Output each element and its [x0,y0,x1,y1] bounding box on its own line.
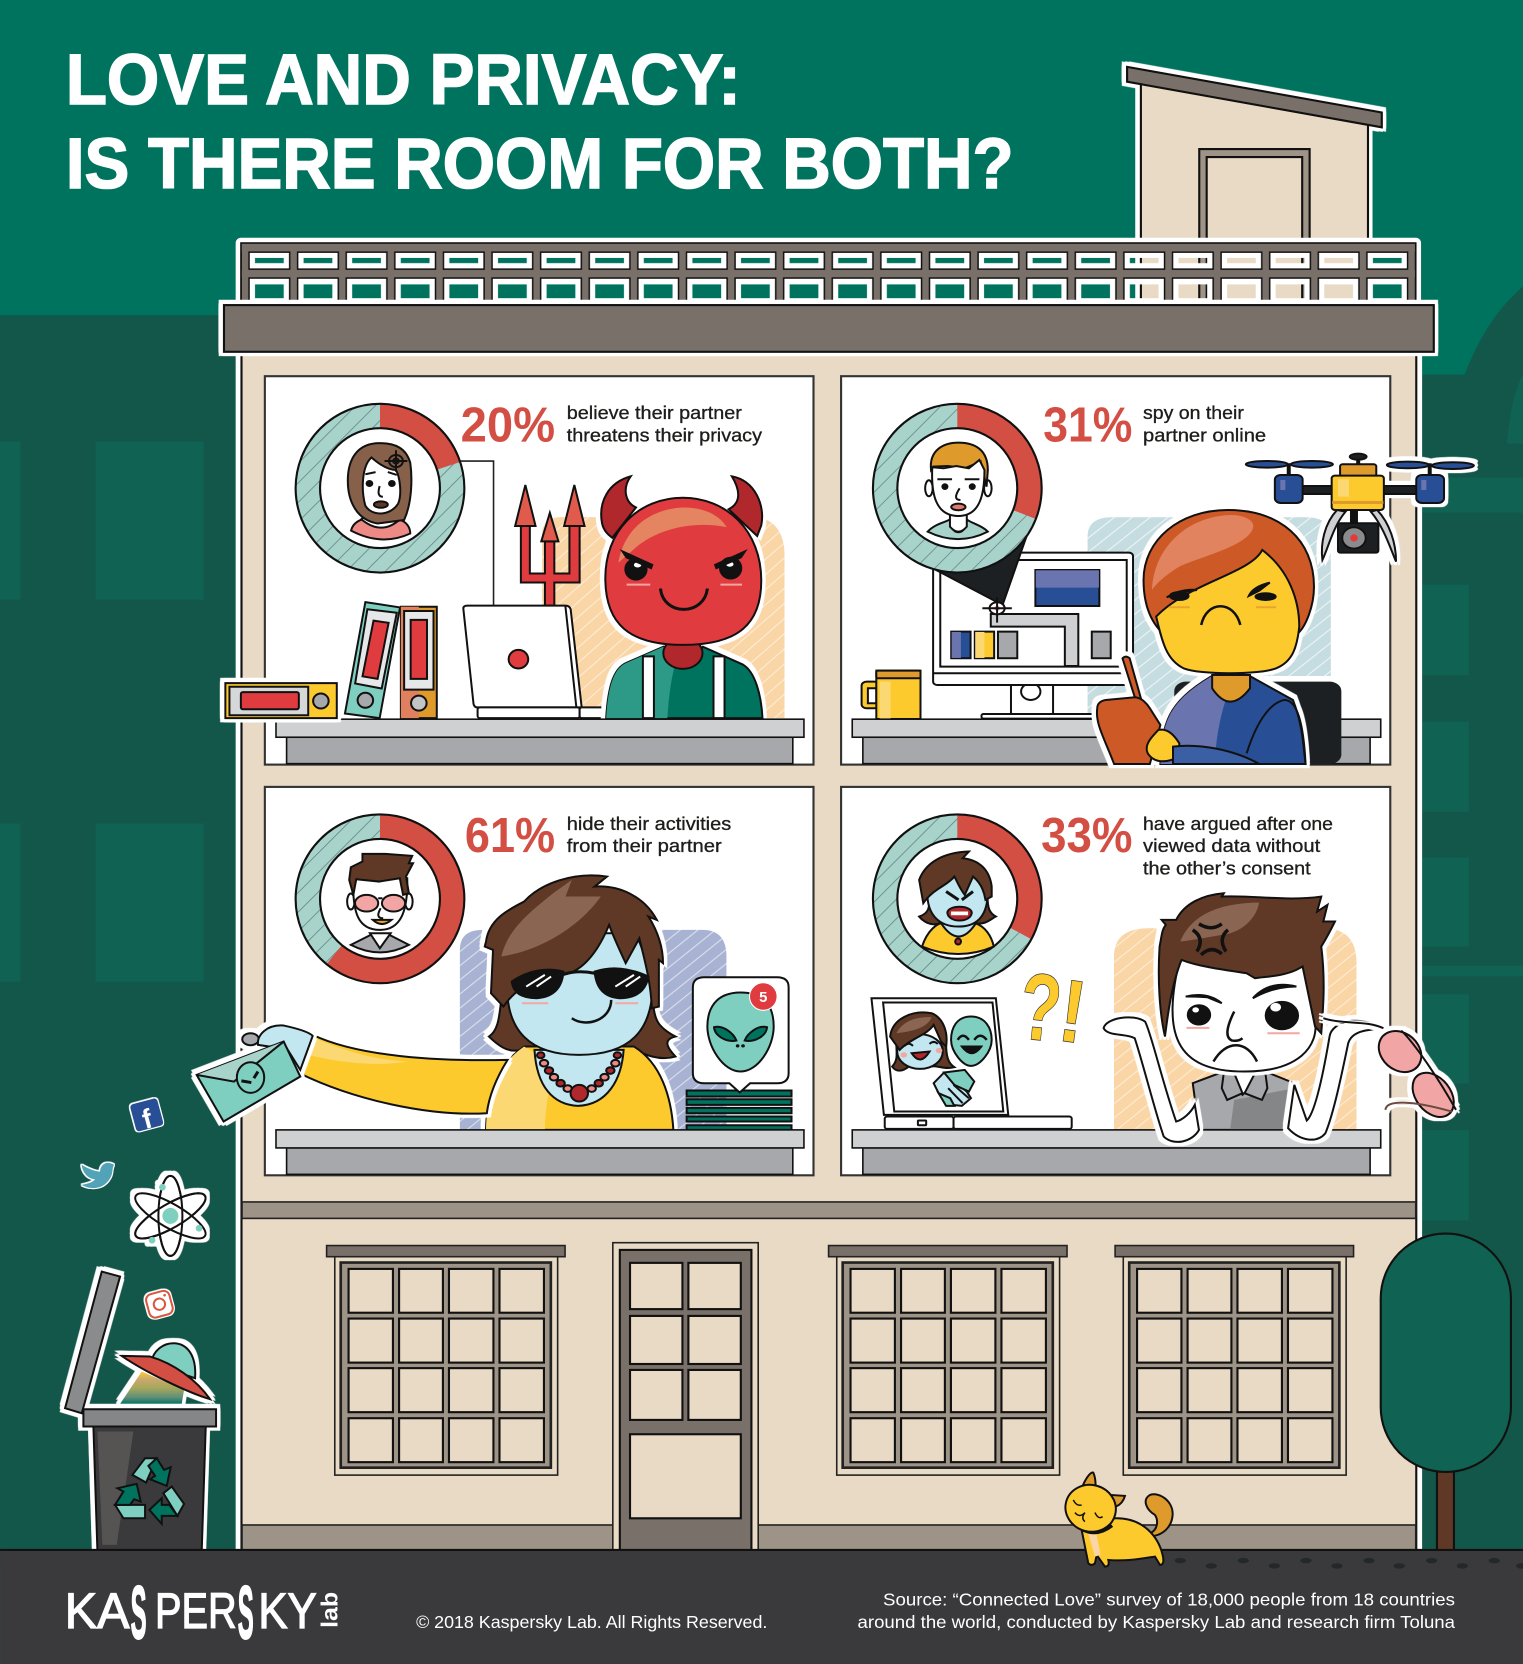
mug [862,671,920,719]
angry man head [1159,893,1335,1072]
pink glasses [1323,1018,1462,1122]
copyright: © 2018 Kaspersky Lab. All Rights Reserved. [416,1612,767,1632]
tree [1381,1234,1511,1550]
caption: spy on their partner online [1143,403,1266,445]
road [0,1550,1523,1664]
teal binder [345,602,400,718]
panel background [265,376,814,765]
cat [1060,1473,1173,1567]
entrance door [613,1243,758,1550]
caption: have argued after one viewed data without the other's consent: have argued after one [1143,814,1333,834]
desk [276,719,804,764]
panel: 61% hide activities [197,787,813,1175]
source note: around the world, conducted by Kaspersky Lab and research firm Toluna [858,1612,1455,1632]
question and exclamation marks [1015,953,1092,1063]
avatar: worried woman [348,443,411,539]
caption: have argued after one viewed data without the other's consent: the other’s consent [1143,858,1311,878]
statistic: 20%: 20% [461,398,555,452]
caption: believe their partner threatens their privacy: believe their partner [567,403,742,423]
logo: Kaspersky Lab: KA [65,1583,130,1639]
logo: Kaspersky Lab: S [131,1571,147,1655]
source note: Source: “Connected Love” survey of 18,000 people from 18 countries [883,1590,1455,1610]
caption: spy on their partner online: partner online [1143,425,1266,445]
donut chart 31 percent [873,404,1042,573]
caption: hide their activities from their partner: from their partner [567,836,722,856]
logo: Kaspersky Lab: lab [317,1592,343,1628]
roof railing parapet [238,240,1418,306]
devil character [601,476,762,718]
title [66,41,1014,204]
panel background [265,787,814,1175]
background building left [0,315,239,1567]
desk [852,1130,1381,1174]
panel background [841,376,1390,765]
rooftop penthouse [1127,67,1382,310]
trident [515,485,585,606]
logo: Kaspersky Lab: PER [155,1583,237,1639]
orange binder [401,607,437,718]
caption: spy on their partner online: spy on their [1143,403,1244,423]
notification badge: 5 [759,990,767,1006]
logo: Kaspersky Lab [65,1571,343,1655]
spying woman character [1097,510,1314,764]
caption: have argued after one viewed data without the other's consent: viewed data without [1143,836,1320,856]
recycling bin [65,1272,216,1551]
angry man torso [1193,1072,1294,1130]
panel background [841,787,1390,1175]
peach hatched backdrop [542,517,785,718]
pavement dots [1175,1558,1523,1569]
logo: Kaspersky Lab: S [238,1571,254,1655]
title: IS THERE ROOM FOR BOTH? [66,125,1014,204]
envelope with alien [197,1025,313,1122]
icon: facebook [130,1098,165,1137]
statistic: 61%: 61% [465,809,555,863]
desk [852,719,1381,764]
shrugging arms [1104,1017,1383,1142]
panel: 20% believe partner threatens privacy [225,376,814,765]
roof cornice [224,305,1434,352]
caption: hide their activities from their partner [567,814,731,856]
hiding woman character [485,875,675,1130]
icon: instagram [145,1290,174,1319]
periwinkle hatched backdrop [460,930,726,1130]
question and exclamation marks: ! [1053,960,1092,1063]
caption: have argued after one viewed data without the other's consent [1143,814,1333,878]
flying saucer in the bin [120,1343,210,1404]
avatar: shouting woman [919,852,996,954]
statistic: 33%: 33% [1041,809,1132,863]
notification badge [750,983,777,1010]
lower facade band [242,1525,1416,1550]
chair [1174,682,1341,764]
desktop monitor [933,553,1133,719]
laptop back [463,606,639,718]
building facade [236,340,1422,1555]
target pointer from donut to monitor [937,535,1027,623]
statistic: 31%: 31% [1043,398,1132,452]
donut chart 33 percent [873,814,1042,983]
caption: believe their partner threatens their privacy: threatens their privacy [567,425,762,445]
panel: 31% spy on partner online [841,376,1390,765]
caption: believe their partner threatens their privacy [567,403,762,445]
icon: atom [130,1176,211,1256]
donut chart 20 percent [296,404,464,573]
avatar: smiling man with pink glasses [347,854,413,952]
laptop showing woman and alien shaking hands [871,998,1072,1129]
speech bubble with alien [693,977,789,1093]
icon: drone [1246,454,1474,562]
flat yellow binder [225,683,337,718]
peach hatched backdrop [1114,928,1356,1130]
icon: facebook: f [139,1102,156,1135]
stack of books [687,1091,792,1130]
desk [276,1130,804,1174]
avatar: worried man [925,443,992,539]
window: ground floor right [1115,1246,1354,1475]
window: ground floor left [327,1246,565,1475]
title: LOVE AND PRIVACY: [66,41,741,120]
question and exclamation marks: ? [1015,953,1067,1063]
bin detail and recycle symbol [97,1432,184,1545]
blue hatched backdrop [1088,517,1331,764]
upper facade band [242,1202,1416,1218]
icon: twitter bird [82,1163,114,1188]
logo: Kaspersky Lab: KY [258,1583,317,1639]
background building right [1417,287,1523,1567]
caption: hide their activities from their partner: hide their activities [567,814,731,834]
source note [858,1590,1455,1632]
window: ground floor centre [829,1246,1067,1475]
outstretched yellow arm [299,1035,508,1114]
connector line from target to laptop [394,461,494,605]
donut chart 61 percent [296,814,464,983]
panel: 33% argued after viewing data [841,787,1462,1175]
